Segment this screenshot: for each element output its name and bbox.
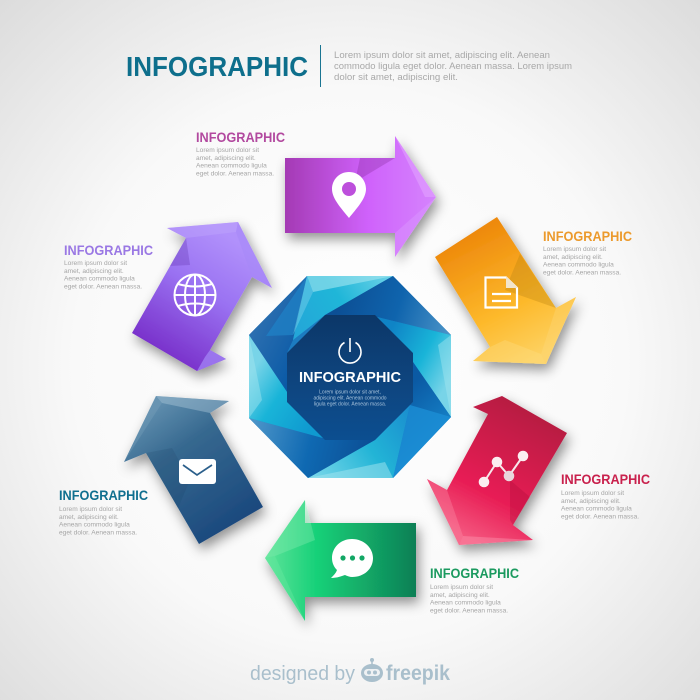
text block: magenta: Lorem ipsum dolor sit: [196, 147, 259, 154]
text block: blue: amet, adipiscing elit.: [59, 514, 119, 521]
text block: red: INFOGRAPHIC: [561, 471, 650, 487]
text block: blue: Lorem ipsum dolor sit: [59, 506, 122, 513]
centre description: adipiscing elit. Aenean commodo: [313, 396, 387, 402]
text block: violet: INFOGRAPHIC: [64, 242, 153, 258]
text block: orange: amet, adipiscing elit.: [543, 254, 603, 261]
icon: freepik mascot: [361, 658, 383, 682]
text block: violet: eget dolor. Aenean massa.: [64, 284, 142, 290]
centre heading: INFOGRAPHIC: [299, 369, 401, 386]
panel: green arrow: [265, 500, 416, 621]
icon: document: [486, 276, 518, 308]
icon: globe: [174, 274, 216, 316]
text block: orange: eget dolor. Aenean massa.: [543, 270, 621, 276]
octagon centre panel: [287, 315, 413, 440]
text block: red: Aenean commodo ligula: [561, 506, 632, 512]
text block: green: [430, 565, 519, 614]
arrow shape: [427, 396, 567, 545]
text block: green: eget dolor. Aenean massa.: [430, 608, 508, 614]
text block: green: amet, adipiscing elit.: [430, 592, 490, 599]
title: INFOGRAPHIC: [126, 51, 308, 82]
footer credit: designed by: [250, 663, 355, 685]
text block: blue: Aenean commodo ligula: [59, 522, 130, 528]
text block: blue: [59, 487, 148, 536]
title description: Lorem ipsum dolor sit amet, adipiscing elit. Aenean: [334, 50, 550, 61]
text block: magenta: Aenean commodo ligula: [196, 162, 267, 170]
text block: magenta: [196, 129, 285, 178]
panel: violet arrow: [132, 222, 272, 371]
text block: green: Lorem ipsum dolor sit: [430, 584, 493, 591]
text block: red: [561, 471, 650, 520]
icon: speech bubble: [331, 539, 373, 578]
text block: green: Aenean commodo ligula: [430, 600, 501, 606]
text block: blue: INFOGRAPHIC: [59, 487, 148, 503]
arrow shape: [435, 217, 576, 364]
text block: red: eget dolor. Aenean massa.: [561, 514, 639, 520]
icon: power: [339, 338, 361, 363]
panel: red arrow: [427, 396, 567, 545]
arrow shape: [132, 222, 272, 371]
footer credit: freepik: [386, 662, 450, 685]
title description: [334, 50, 572, 83]
text block: violet: Aenean commodo ligula: [64, 276, 135, 282]
panel: purple arrow: [285, 136, 436, 257]
arrow shape: [265, 500, 416, 621]
text block: orange: INFOGRAPHIC: [543, 228, 632, 244]
icon: location pin: [332, 172, 366, 218]
icon: line chart: [479, 451, 528, 487]
text block: green: INFOGRAPHIC: [430, 565, 519, 581]
text block: orange: Lorem ipsum dolor sit: [543, 246, 606, 253]
text block: violet: Lorem ipsum dolor sit: [64, 260, 127, 267]
text block: orange: [543, 228, 632, 276]
text block: magenta: amet, adipiscing elit.: [196, 155, 256, 162]
centre description: ligula eget dolor. Aenean massa.: [314, 402, 386, 408]
title description: dolor sit amet, adipiscing elit.: [334, 72, 458, 83]
text block: red: amet, adipiscing elit.: [561, 498, 621, 505]
text block: magenta: INFOGRAPHIC: [196, 129, 285, 145]
arrow shape: [285, 136, 436, 257]
text block: orange: Aenean commodo ligula: [543, 262, 614, 268]
icon: envelope: [179, 459, 216, 484]
text block: violet: amet, adipiscing elit.: [64, 268, 124, 275]
text block: red: Lorem ipsum dolor sit: [561, 490, 624, 497]
arrow shape: [124, 396, 263, 544]
text block: blue: eget dolor. Aenean massa.: [59, 530, 137, 536]
panel: steel blue arrow: [124, 396, 263, 544]
text block: magenta: eget dolor. Aenean massa.: [196, 170, 274, 178]
centre description: Lorem ipsum dolor sit amet,: [319, 390, 381, 396]
title description: commodo ligula eget dolor. Aenean massa. Lorem ipsum: [334, 61, 572, 72]
footer credit: [250, 658, 450, 685]
centre description: [313, 390, 387, 408]
central octagon: [249, 276, 451, 478]
panel: orange arrow: [435, 217, 576, 364]
title block: [126, 45, 572, 87]
text block: violet: [64, 242, 153, 290]
